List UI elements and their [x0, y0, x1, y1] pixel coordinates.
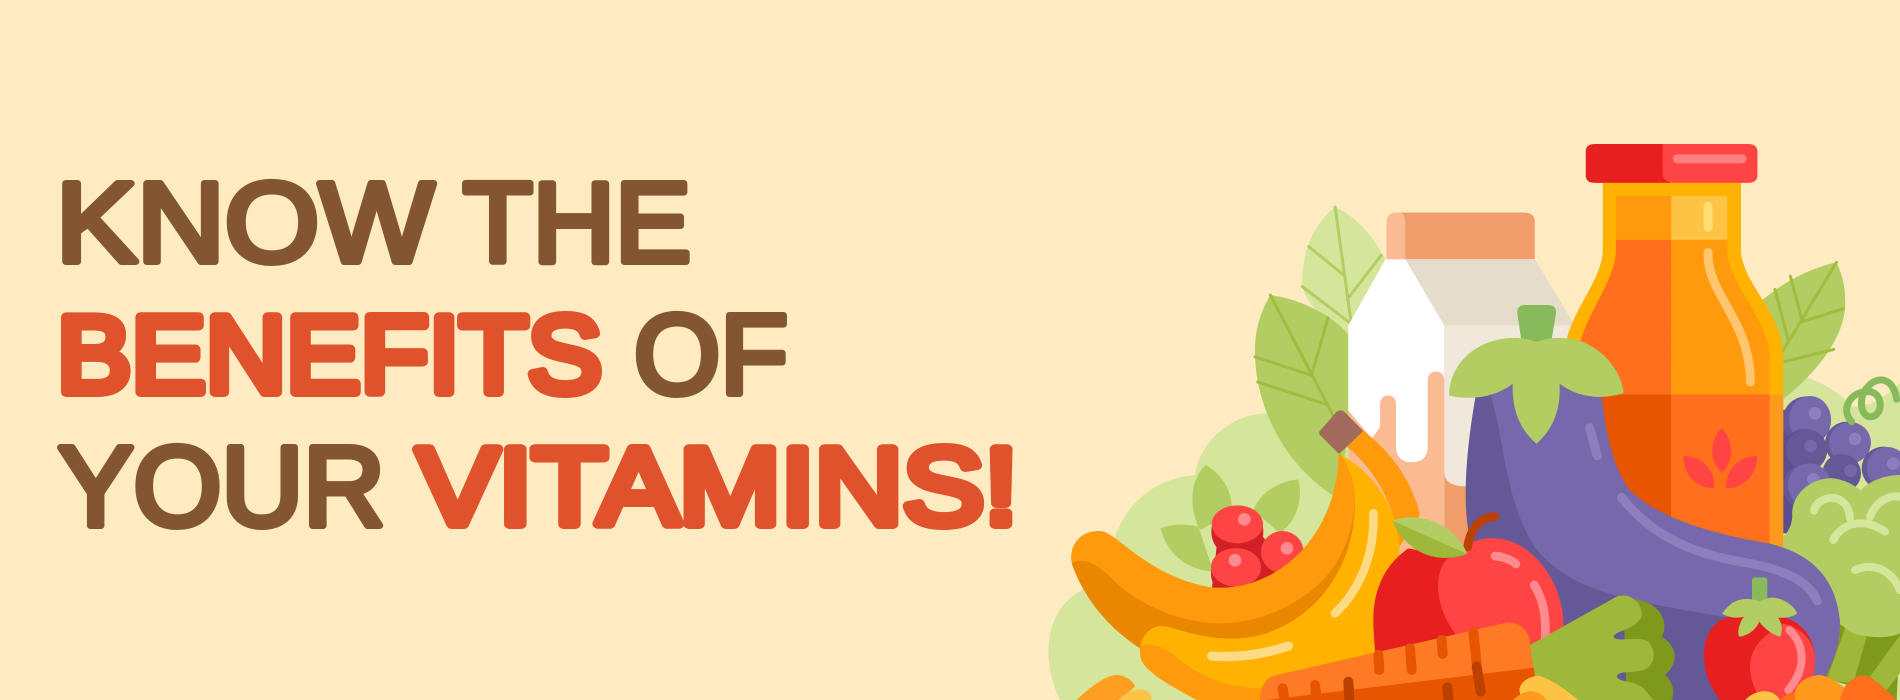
illustration: vitamin foods: [1048, 144, 1900, 700]
title line 2: BENEFITS: [57, 294, 602, 416]
eggplant stem: [1517, 305, 1556, 342]
eggplant: [1449, 305, 1840, 700]
title line 3: [58, 424, 1018, 550]
green leaf left: [1255, 295, 1353, 497]
berries with leaves: [1161, 465, 1304, 598]
milk carton: [1348, 212, 1609, 584]
title line 1: [56, 160, 691, 286]
title line 3: YOUR: [58, 424, 385, 550]
tomato stem: [1752, 577, 1767, 603]
juice bottle: [1564, 144, 1783, 565]
carrot: [1260, 623, 1535, 700]
title line 1: THE: [463, 160, 691, 286]
background blobs: [1048, 373, 1900, 700]
bottom fruits right: [1745, 675, 1897, 700]
tomato calyx: [1722, 598, 1797, 637]
pale leaf: [1302, 207, 1386, 335]
eggplant calyx: [1449, 338, 1624, 444]
bottle label: leaf logo: [1683, 428, 1757, 488]
broccoli: [1783, 475, 1900, 700]
lettuce: [1530, 595, 1675, 700]
bottom fruits left: [1077, 675, 1152, 700]
grape tendril: [1847, 380, 1897, 422]
title line 1: KNOW: [56, 160, 434, 286]
title line 2: OF: [634, 292, 788, 418]
tomato: [1704, 577, 1815, 700]
bananas: [1071, 410, 1420, 700]
banana stem: [1319, 410, 1363, 454]
bottle cap: [1586, 144, 1757, 183]
green leaf right: [1753, 262, 1845, 401]
bottom fruits centre: [1513, 676, 1578, 700]
apple: [1373, 517, 1563, 667]
title: [56, 160, 1018, 550]
title line 3: VITAMINS!: [417, 426, 1018, 548]
apple stem: [1468, 517, 1495, 547]
grapes: [1782, 396, 1900, 533]
apple leaf: [1392, 517, 1467, 558]
